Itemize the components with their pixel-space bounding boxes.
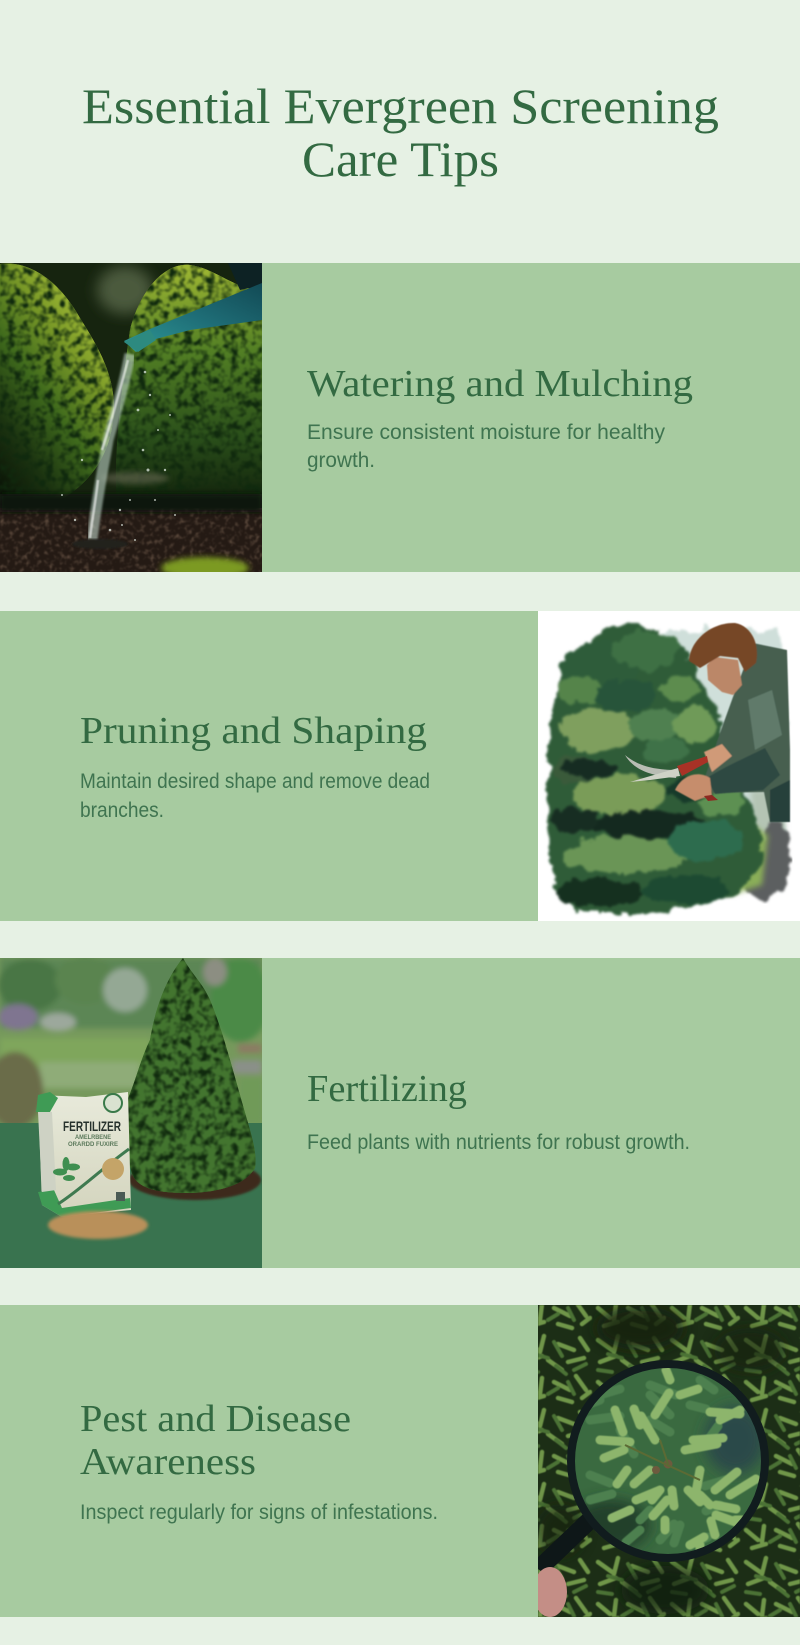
- shears: [625, 755, 718, 801]
- tree: [548, 624, 761, 914]
- body text: [80, 770, 430, 822]
- body text: Maintain desired shape and remove dead: [80, 770, 430, 793]
- photo: fertilizer bag beside tree: [0, 956, 270, 1268]
- title: [82, 78, 719, 187]
- magnifying handle: [545, 1518, 592, 1563]
- heading: Pest and Disease: [80, 1398, 351, 1440]
- illustration: person pruning tree: [538, 611, 800, 921]
- evergreen tree: [122, 958, 256, 1193]
- title: Care Tips: [302, 131, 499, 187]
- heading: Watering and Mulching: [307, 363, 693, 405]
- bag label: [64, 1122, 121, 1146]
- fertilizer bag: [36, 1092, 131, 1217]
- heading: Awareness: [80, 1441, 256, 1483]
- panel: watering and mulching: [0, 263, 800, 579]
- body text: growth.: [307, 449, 375, 472]
- mulch ring: [130, 1170, 262, 1202]
- green table: [0, 1123, 262, 1268]
- panel: fertilizing: [0, 956, 800, 1268]
- heading: [80, 1398, 351, 1483]
- panel: pest and disease awareness: [0, 1305, 800, 1617]
- bag label: ORARDD FUXIRE: [68, 1141, 119, 1148]
- photo: watering can over shrubs: [0, 263, 262, 579]
- finger: [538, 1567, 567, 1617]
- heading: Pruning and Shaping: [80, 710, 427, 752]
- body text: Feed plants with nutrients for robust growth.: [307, 1131, 690, 1154]
- panel background: [0, 958, 800, 1268]
- title: Essential Evergreen Screening: [82, 78, 719, 134]
- heading: Fertilizing: [307, 1068, 467, 1110]
- body text: Inspect regularly for signs of infestations.: [80, 1501, 438, 1524]
- lens: [570, 1364, 765, 1560]
- panel background: [0, 263, 800, 572]
- bag label: FERTILIZER: [63, 1118, 121, 1134]
- fertilizer pile: [48, 1211, 148, 1239]
- bag label: AMELRBENE: [75, 1134, 112, 1141]
- body text: Ensure consistent moisture for healthy: [307, 421, 665, 444]
- body text: branches.: [80, 799, 164, 822]
- panel: pruning and shaping: [0, 611, 800, 921]
- photo: magnifying glass over needles: [533, 1305, 800, 1617]
- watering can spout: [124, 263, 262, 352]
- water stream: [61, 354, 176, 549]
- panel background: [0, 1305, 538, 1617]
- person: [675, 623, 790, 822]
- body text: [307, 421, 665, 472]
- panel background: [0, 611, 538, 921]
